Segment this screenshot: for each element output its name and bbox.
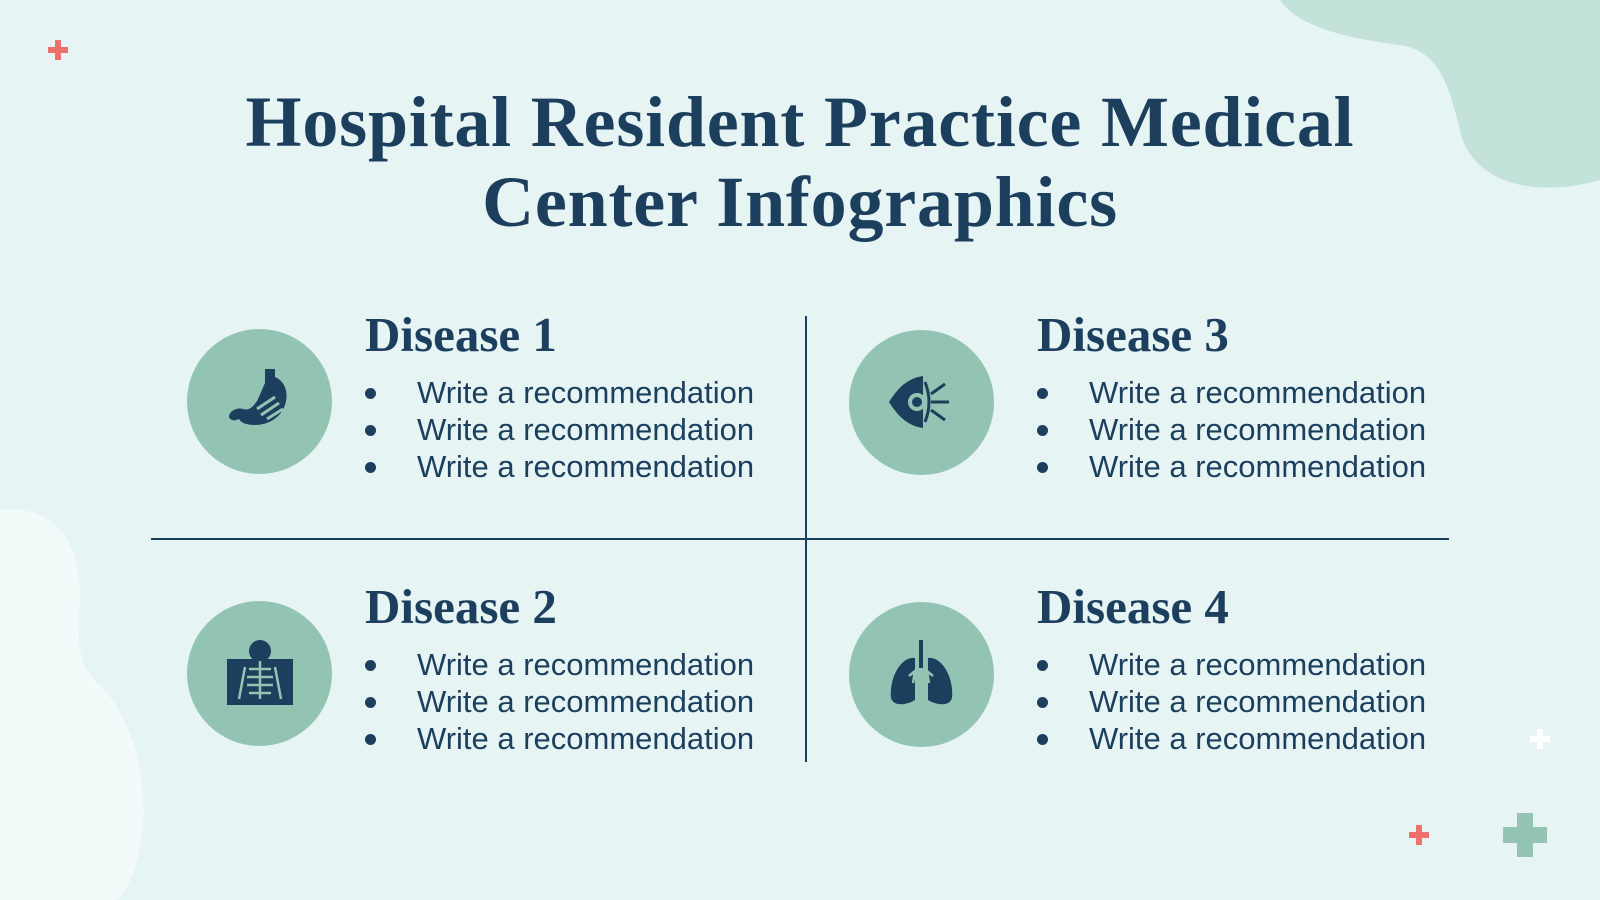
panel: disease 3: Write a recommendation <box>1089 375 1426 410</box>
panel: disease 1: Write a recommendation <box>417 449 754 484</box>
panel: disease 4: Write a recommendation <box>1089 721 1426 756</box>
panel: disease 3: Disease 3 <box>1037 307 1229 362</box>
panel: disease 1 <box>365 307 754 484</box>
panel: disease 1: Disease 1 <box>365 307 557 362</box>
decorative blob bottom left <box>0 510 144 900</box>
panel: disease 2: Write a recommendation <box>417 684 754 719</box>
panel: disease 3: Write a recommendation <box>1089 449 1426 484</box>
panel: disease 2: Write a recommendation <box>417 647 754 682</box>
panel: disease 3: Write a recommendation <box>1089 412 1426 447</box>
title <box>246 82 1354 242</box>
icon: eye <box>849 330 994 475</box>
title: Hospital Resident Practice Medical <box>246 82 1354 162</box>
panel: disease 1: Write a recommendation <box>417 375 754 410</box>
icon: x-ray <box>187 601 332 746</box>
vertical divider <box>805 316 807 762</box>
icon: red cross top left <box>48 40 68 60</box>
panel: disease 2 <box>365 579 754 756</box>
panel: disease 3 <box>1037 307 1426 484</box>
panel: disease 1: Write a recommendation <box>417 412 754 447</box>
panel: disease 4: Write a recommendation <box>1089 684 1426 719</box>
title: Center Infographics <box>482 162 1118 242</box>
icon: lungs <box>849 602 994 747</box>
icon: white cross <box>1530 729 1550 749</box>
horizontal divider <box>151 538 1449 540</box>
icon: red cross bottom right <box>1409 825 1429 845</box>
panel: disease 2: Disease 2 <box>365 579 557 634</box>
icon: stomach <box>187 329 332 474</box>
panel: disease 4: Disease 4 <box>1037 579 1229 634</box>
icon: green cross bottom right <box>1503 813 1547 857</box>
panel: disease 2: Write a recommendation <box>417 721 754 756</box>
panel: disease 4 <box>1037 579 1426 756</box>
decorative blob top right <box>1280 0 1600 188</box>
panel: disease 4: Write a recommendation <box>1089 647 1426 682</box>
